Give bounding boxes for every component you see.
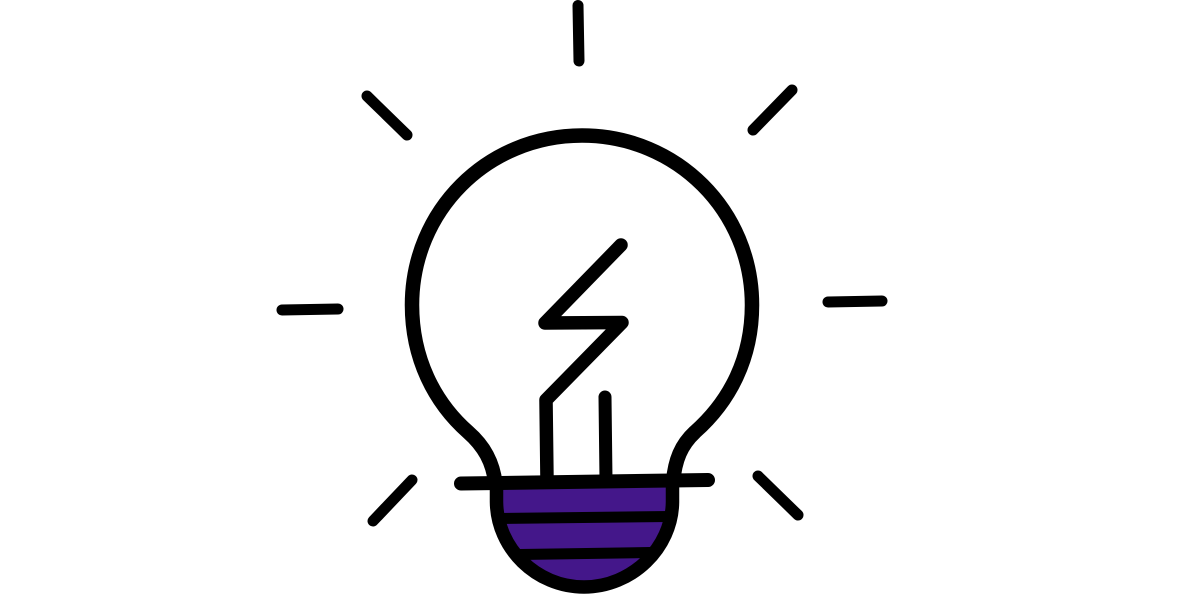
filament post	[605, 397, 606, 480]
base collar line	[461, 480, 708, 484]
ray left	[282, 309, 338, 310]
filament bolt	[545, 245, 622, 480]
base stripe upper	[500, 516, 669, 518]
bulb base outline	[496, 482, 672, 587]
ray top left	[367, 96, 407, 135]
ray bottom left	[373, 480, 412, 521]
bulb glass outline	[412, 136, 752, 484]
base stripe lower	[520, 552, 650, 554]
ray top	[578, 6, 579, 61]
icon: purple bulb base fill	[497, 483, 673, 585]
ray top right	[753, 90, 792, 130]
ray bottom right	[758, 476, 798, 515]
ray right	[828, 301, 882, 302]
